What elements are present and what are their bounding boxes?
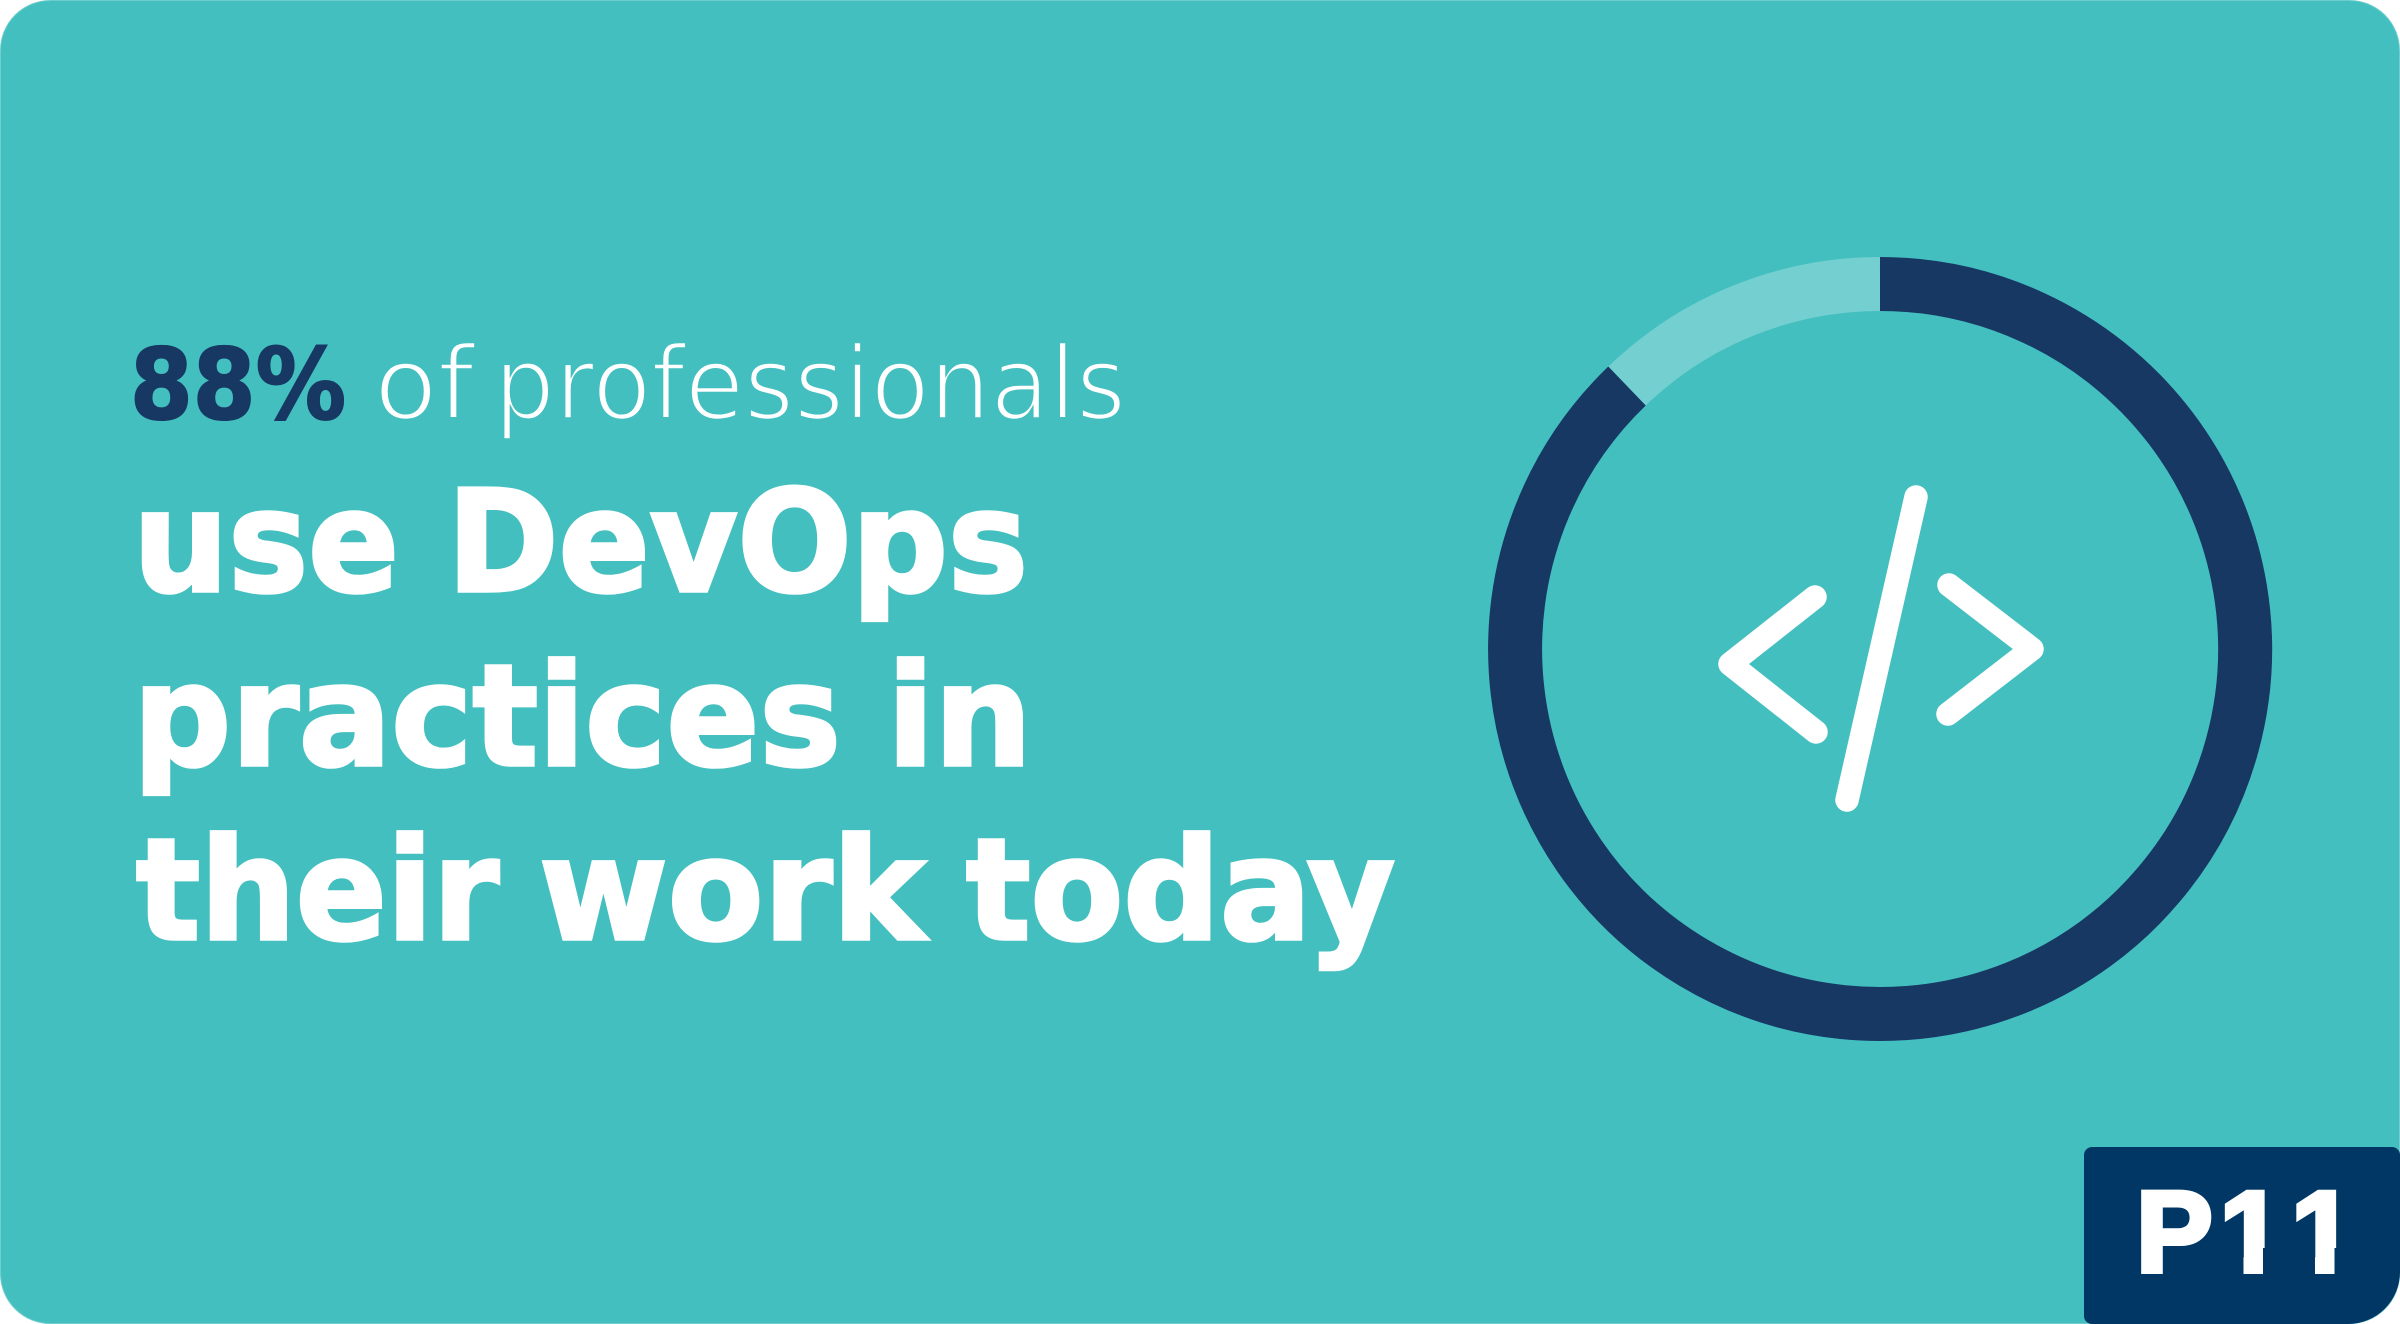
statistic text block xyxy=(130,325,1395,973)
headline line: their work today: work xyxy=(539,809,928,973)
headline line: their work today: their xyxy=(136,809,499,973)
slash xyxy=(1847,497,1916,800)
ring track: remaining 12 percent xyxy=(1627,284,1880,386)
headline line: their work today xyxy=(136,809,1395,973)
page badge: P11: P11 xyxy=(2136,1168,2355,1296)
headline line: their work today: today xyxy=(966,809,1395,973)
icon: code brackets xyxy=(1730,497,2032,800)
page badge: P11 xyxy=(2084,1147,2400,1324)
headline line: practices in: practices xyxy=(133,635,841,799)
headline line: use DevOps: use xyxy=(133,461,399,625)
headline line: use DevOps xyxy=(133,461,1028,625)
ring value: 88 percent xyxy=(1515,284,2245,1014)
left chevron xyxy=(1730,597,1816,732)
headline line: practices in: in xyxy=(887,635,1032,799)
heading line: 88% of professionals xyxy=(130,325,1126,444)
donut chart: 88 percent xyxy=(1515,284,2245,1014)
headline line: use DevOps: DevOps xyxy=(447,461,1028,625)
heading line: 88% of professionals: professionals xyxy=(494,325,1126,444)
right chevron xyxy=(1948,585,2032,714)
heading line: 88% of professionals: of xyxy=(374,325,476,444)
heading line: 88% of professionals: 88% xyxy=(130,328,346,442)
